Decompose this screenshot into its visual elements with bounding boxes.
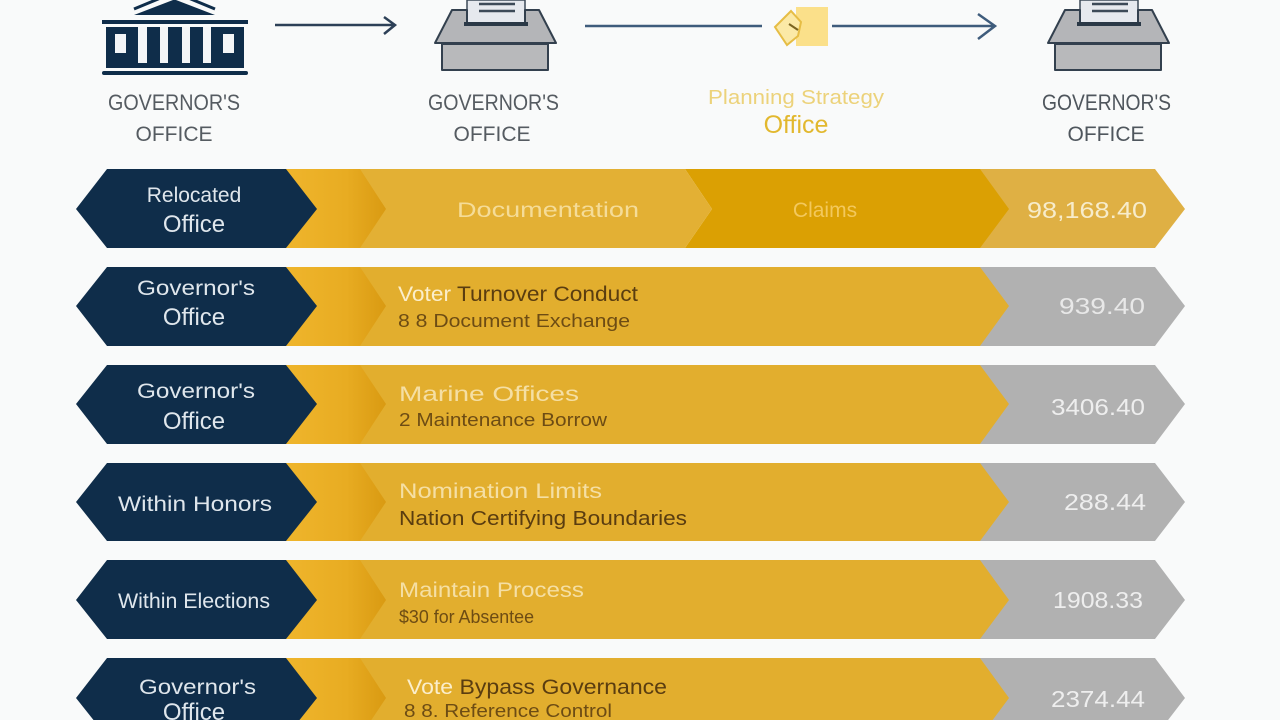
row 3: Marine Offices bbox=[399, 383, 579, 406]
row 4: Nomination Limits bbox=[399, 480, 602, 503]
row 2 bbox=[76, 267, 1185, 346]
label: second column: GOVERNOR'S bbox=[428, 90, 559, 115]
row 2: 8 8 Document Exchange bbox=[398, 311, 630, 331]
row 1: Documentation bbox=[457, 199, 639, 222]
row 6: Vote Bypass Governance bbox=[407, 676, 667, 699]
row 4: 288.44 bbox=[1064, 489, 1146, 515]
row 6: 2374.44 bbox=[1051, 686, 1145, 712]
row 5: 1908.33 bbox=[1053, 587, 1143, 613]
row 3: 3406.40 bbox=[1051, 394, 1145, 420]
icon: ballot box two bbox=[1048, 0, 1169, 70]
label: fourth column: GOVERNOR'S bbox=[1042, 90, 1171, 115]
row 3 bbox=[76, 365, 1185, 444]
label: first column: OFFICE bbox=[136, 123, 212, 146]
label: third column: Planning Strategy bbox=[708, 87, 884, 109]
row 1: Claims bbox=[793, 199, 857, 222]
label: second column: OFFICE bbox=[454, 123, 530, 146]
row 1: Relocated bbox=[147, 184, 241, 207]
row 5: $30 for Absentee bbox=[399, 607, 534, 627]
row 2: 939.40 bbox=[1059, 293, 1145, 319]
icon: ballot box one bbox=[435, 0, 556, 70]
row 4: Nation Certifying Boundaries bbox=[399, 508, 687, 530]
row 3: Office bbox=[163, 408, 225, 435]
row 6: Governor's bbox=[139, 676, 256, 699]
arrow: second step bbox=[585, 14, 995, 39]
row 3: 2 Maintenance Borrow bbox=[399, 410, 608, 430]
row 3: Governor's bbox=[137, 380, 255, 403]
row 6 bbox=[76, 658, 1185, 720]
row 4: Within Honors bbox=[118, 493, 272, 516]
arrow: first step bbox=[275, 17, 395, 34]
row 1 bbox=[76, 169, 1185, 248]
row 5: Within Elections bbox=[118, 590, 270, 613]
row 5: Maintain Process bbox=[399, 579, 584, 602]
row 1: 98,168.40 bbox=[1027, 197, 1147, 223]
row 1: Office bbox=[163, 211, 225, 238]
label: third column: Office bbox=[764, 111, 828, 139]
label: first column: GOVERNOR'S bbox=[108, 90, 240, 115]
row 2: Governor's bbox=[137, 277, 255, 300]
row 2: Voter Turnover Conduct bbox=[398, 283, 638, 306]
row 2: Office bbox=[163, 304, 225, 331]
icon: government building bbox=[102, 0, 248, 75]
label: fourth column: OFFICE bbox=[1068, 123, 1144, 146]
row 4 bbox=[76, 463, 1185, 541]
icon: yellow note bbox=[775, 7, 828, 46]
row 5 bbox=[76, 560, 1185, 639]
